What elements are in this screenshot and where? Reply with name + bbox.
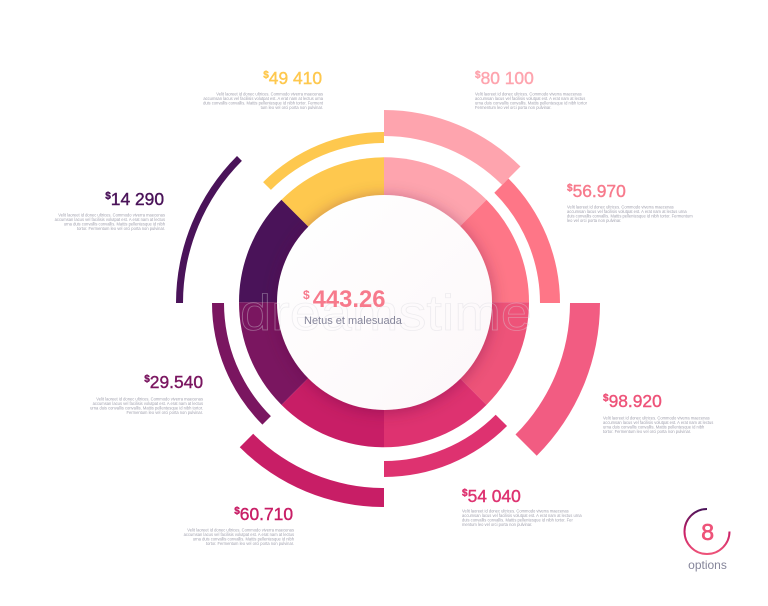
description: accumsan lacus vel facilisis volutpat est. A erat nam at lectus [93, 401, 203, 406]
donut ring [239, 157, 529, 447]
description: tortor. Fermentum leo vel orci porta non pulvinar. [77, 226, 165, 231]
description: Velit laoreet id donec ultrices. Commodo viverra maecenas [58, 212, 165, 218]
ring segment 4 [384, 302, 487, 447]
options badge [684, 509, 730, 572]
ring segment 5 [281, 302, 384, 447]
description: Velit laoreet id donec ultrices. Commodo viverra maecenas [216, 92, 323, 96]
badge label: options [688, 558, 727, 572]
value: $ [567, 183, 573, 194]
description: accumsan lacus vel facilisis volutpat est. A erat nam at lectus [603, 420, 713, 425]
badge number: 8 [701, 519, 714, 545]
value: $ [234, 506, 240, 517]
value: 60.710 [240, 504, 293, 524]
description: urna duis convallis convallis. Mattis pellentesque id nibh tortor [475, 100, 588, 106]
value: 49 410 [269, 68, 322, 88]
description: leo vel orci porta non pulvinar. [567, 218, 621, 223]
value: 80 100 [481, 68, 534, 88]
outer arc 60.710 [240, 434, 384, 507]
callout 80 100 [475, 68, 588, 110]
value: 29.540 [150, 372, 203, 392]
description: accumsan lacus vel facilisis volutpat est. A erat nam at lectus urna [462, 513, 582, 518]
callout 14 290 [55, 189, 166, 231]
description: duis convallis convallis. Mattis pellentesque id nibh tortor. Ferment [203, 100, 324, 106]
outer arc 14 290 [176, 156, 242, 303]
description: tum leo vel orci porta non pulvinar. [261, 105, 323, 110]
outer arc 29.540 [212, 303, 271, 425]
description: urna duis convallis convallis. Mattis pellentesque id nibh [603, 424, 705, 430]
description: tortor. Fermentum leo vel orci porta non pulvinar. [206, 541, 294, 546]
ring segment 3 [384, 302, 529, 405]
description: duis convallis convallis. Mattis pellentesque id nibh tortor. Fer [462, 518, 573, 522]
outer arc 49 410 [263, 132, 384, 190]
outer arc 80 100 [384, 110, 520, 185]
outer arc 56.970 [494, 179, 560, 303]
value: 56.970 [573, 181, 626, 201]
center label: Netus et malesuada [304, 315, 403, 327]
description: duis convallis convallis. Mattis pellentesque id nibh tortor. Fermentum [567, 214, 693, 218]
badge arc [684, 509, 730, 554]
description: Velit laoreet id donec ultrices. Commodo viverra maecenas [462, 508, 569, 514]
center value: 443.26 [313, 286, 385, 313]
description: accumsan lacus vel facilisis volutpat est. A erat nam at lectus urna [567, 209, 687, 214]
description: Velit laoreet id donec ultrices. Commodo viverra maecenas [187, 528, 294, 532]
center circle [277, 195, 492, 410]
callout 54 040 [462, 486, 582, 527]
description: Fermentum leo vel orci porta non pulvinar. [127, 410, 203, 415]
callout 98.920 [603, 391, 713, 434]
ring segment 7 [239, 200, 384, 302]
description: urna duis convallis convallis. Mattis pellentesque id nibh [193, 536, 295, 542]
outer arc 98.920 [516, 303, 600, 456]
description: urna duis convallis convallis. Mattis pellentesque id nibh [64, 222, 166, 226]
value: 54 040 [468, 486, 521, 506]
watermark: dreamstime [240, 285, 532, 341]
value: $ [475, 70, 481, 81]
description: urna duis convallis convallis. Mattis pellentesque id nibh tortor. [90, 406, 203, 410]
description: Fermentum leo vel orci porta non pulvinar. [475, 105, 551, 110]
description: accumsan lacus vel facilisis volutpat est. A erat nam at lectus [475, 96, 585, 101]
callout 60.710 [184, 504, 295, 546]
callout 49 410 [203, 68, 324, 110]
description: accumsan lacus vel facilisis volutpat est. A erat nam at lectus [184, 532, 294, 537]
ring segment 6 [239, 302, 384, 405]
description: tortor. Fermentum leo vel orci porta non pulvinar. [603, 429, 691, 434]
callout 29.540 [90, 372, 203, 415]
value: $ [144, 374, 150, 385]
description: accumsan lacus vel facilisis volutpat est. A erat nam at lectus [55, 217, 165, 222]
ring segment 8 [281, 157, 384, 302]
ring segment 1 [384, 157, 487, 302]
callout 56.970 [567, 181, 693, 223]
center value: $ [303, 288, 310, 302]
ring segment 2 [384, 200, 529, 302]
outer arc 54 040 [384, 415, 507, 477]
value: $ [603, 393, 609, 404]
description: mentum leo vel orci porta non pulvinar. [462, 522, 532, 527]
value: $ [263, 70, 269, 81]
description: accumsan lacus vel facilisis volutpat est. A erat nam at lectus urna [203, 96, 324, 101]
value: $ [105, 191, 111, 202]
description: Velit laoreet id donec ultrices. Commodo viverra maecenas [96, 396, 203, 402]
description: Velit laoreet id donec ultrices. Commodo viverra maecenas [475, 92, 582, 96]
value: 98.920 [609, 391, 662, 411]
value: $ [462, 488, 468, 499]
description: Velit laoreet id donec ultrices. Commodo viverra maecenas [603, 416, 710, 420]
value: 14 290 [111, 189, 164, 209]
description: Velit laoreet id donec ultrices. Commodo viverra maecenas [567, 204, 674, 210]
center total [303, 286, 403, 327]
